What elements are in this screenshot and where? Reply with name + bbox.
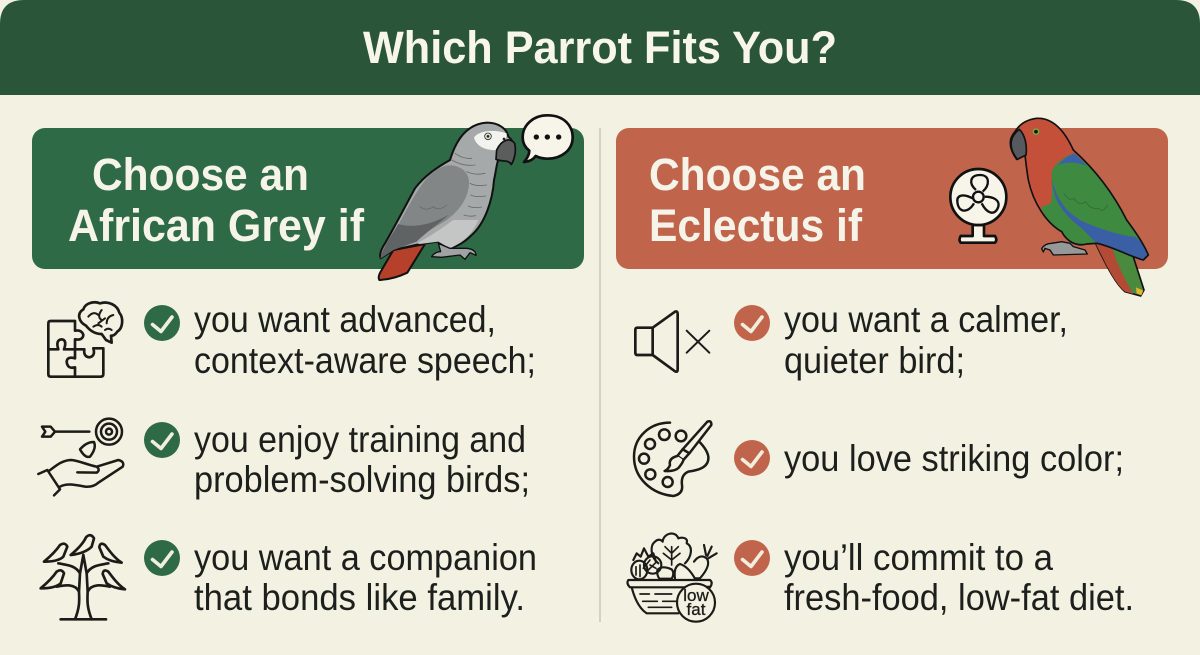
icon: puzzle and brain <box>48 302 122 377</box>
panel: Eclectus header <box>616 118 1168 296</box>
text: diet: you’ll commit to a <box>784 537 1053 578</box>
text: training: you enjoy training and <box>194 419 526 460</box>
heading: Choose an Eclectus <box>649 149 866 251</box>
icon: food basket <box>627 534 717 622</box>
list: Eclectus reasons <box>627 299 1134 622</box>
text: training <box>194 419 530 500</box>
heading: Choose an Eclectus: Eclectus if <box>649 200 863 251</box>
text: family bond <box>194 537 537 618</box>
text: diet <box>784 537 1134 618</box>
icon: target and hand <box>38 419 123 495</box>
list: African Grey reasons <box>38 299 537 619</box>
text: training: problem-solving birds; <box>194 459 530 500</box>
title banner <box>0 0 1200 95</box>
check <box>144 422 180 458</box>
icon: African Grey parrot <box>379 123 515 280</box>
label: low fat: fat <box>687 600 706 619</box>
panel: African Grey header <box>32 115 584 280</box>
icon: muted speaker <box>635 311 709 372</box>
text: quieter <box>784 299 1068 381</box>
text: color: you love striking color; <box>784 438 1124 479</box>
title: Which Parrot Fits You? <box>363 22 837 73</box>
icon: tree with birds <box>41 535 125 619</box>
text: family bond: that bonds like family. <box>194 577 525 618</box>
text: quieter: quieter bird; <box>784 340 965 381</box>
heading: Choose an Eclectus: Choose an <box>649 149 866 200</box>
heading: Choose an African Grey <box>68 149 365 251</box>
icon: Eclectus parrot <box>1010 118 1148 296</box>
text: advanced speech <box>194 299 536 381</box>
check <box>144 305 180 341</box>
check <box>734 440 770 476</box>
label: low fat: low <box>683 586 709 605</box>
heading: Choose an African Grey: African Grey if <box>68 200 365 251</box>
heading: Choose an African Grey: Choose an <box>92 149 309 200</box>
check <box>144 540 180 576</box>
label: low fat <box>683 586 709 619</box>
text: advanced speech: you want advanced, <box>194 299 496 340</box>
icon: fan <box>950 169 1006 243</box>
text: advanced speech: context-aware speech; <box>194 340 536 381</box>
check <box>734 305 770 341</box>
icon: palette <box>634 421 711 496</box>
text: family bond: you want a companion <box>194 537 537 578</box>
icon: speech bubble <box>523 115 573 162</box>
text: quieter: you want a calmer, <box>784 299 1068 340</box>
text: diet: fresh-food, low-fat diet. <box>784 577 1134 618</box>
check <box>734 540 770 576</box>
